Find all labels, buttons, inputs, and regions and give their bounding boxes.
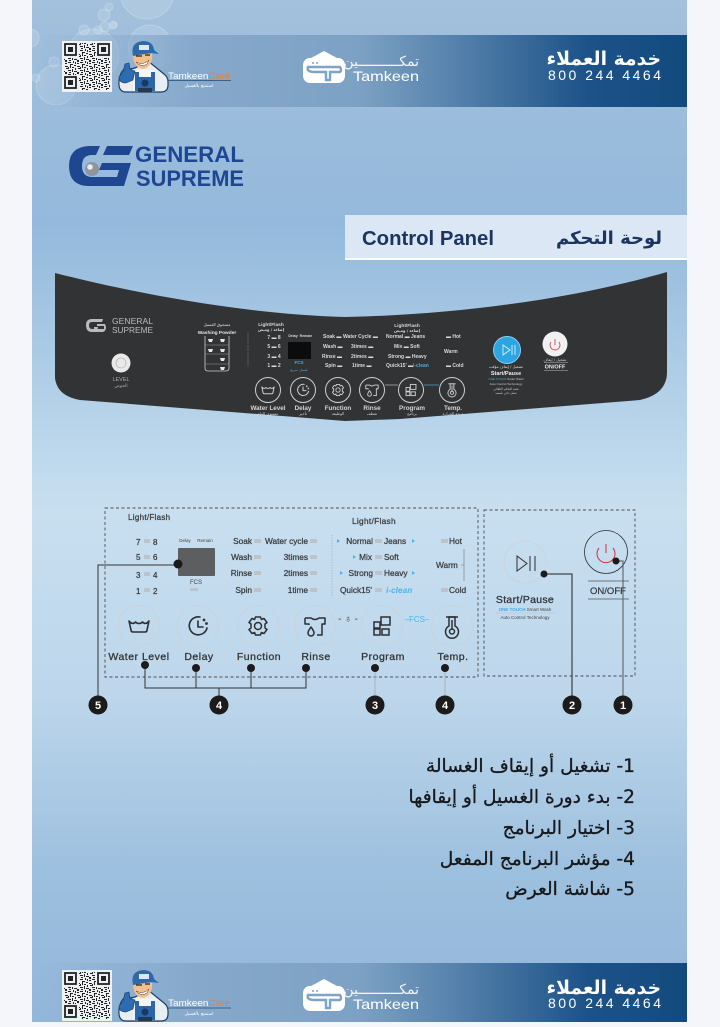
panel round buttons (256, 378, 464, 402)
panel on/off button: ON/OFF (545, 364, 566, 370)
delay button (178, 606, 218, 646)
wash and cycle labels: Water cycle (265, 536, 308, 546)
display screen (178, 538, 215, 591)
left light/flash numbers (128, 513, 170, 596)
button labels (108, 651, 469, 663)
on/off control: ON/OFF (590, 586, 626, 597)
panel cycle labels: Strong ▬ Heavy (388, 354, 427, 360)
program and temperature labels: Cold (449, 585, 466, 595)
numbered markers: 5 (95, 700, 101, 712)
panel start/pause button: تقنية التحكم التلقائي (493, 387, 519, 391)
wash and cycle labels: Soak (233, 536, 253, 546)
panel wash level indicators (258, 322, 312, 369)
program and temperature labels: Warm (436, 560, 458, 570)
left light/flash numbers: 8 (153, 538, 158, 547)
numbered markers (88, 696, 632, 714)
panel on/off button (542, 332, 568, 370)
panel digital display: غسيل سريع (290, 368, 308, 372)
panel cycle labels: إضاءة / وميض (394, 328, 420, 334)
footer mascot and TamkeenCare (119, 970, 231, 1021)
level knob: الحوض (114, 384, 128, 389)
program and temperature labels: Strong (349, 568, 373, 578)
numbered markers: 4 (216, 700, 223, 712)
brand logo: General Supreme: GENERAL (135, 142, 244, 167)
panel cycle labels: Water Cycle ▬ (343, 334, 378, 340)
child lock symbol: - ♁ - (338, 614, 358, 625)
footer customer service: خدمة العملاء (546, 978, 661, 999)
panel start/pause button: غسل ذكي بلمسة (495, 391, 517, 395)
on/off control (584, 530, 629, 599)
header QR code (62, 41, 112, 92)
header mascot and TamkeenCare (119, 41, 231, 92)
function button (238, 606, 278, 646)
panel logo: GENERAL (112, 317, 154, 326)
panel button labels: Delay (295, 405, 312, 412)
wash and cycle labels: 3times (284, 552, 308, 562)
footer mascot and TamkeenCare: TamkeenCare (168, 998, 230, 1009)
panel start/pause button: Start/Pause (491, 371, 521, 377)
program and temperature labels: Light/Flash (352, 516, 396, 526)
panel cycle labels (322, 323, 464, 369)
leader dots (141, 558, 620, 672)
header customer service (546, 49, 661, 83)
heading band: Control Panel (345, 215, 687, 260)
brand logo: General Supreme: SUPREME (136, 166, 244, 191)
left light/flash numbers: 1 (136, 587, 141, 596)
washing powder drawer: Washing Powder (198, 330, 236, 336)
start/pause control: Auto Control Technology (501, 615, 550, 620)
left light/flash numbers: 6 (153, 553, 158, 562)
program button (362, 606, 402, 646)
washing machine control panel photo (55, 272, 667, 421)
program and temperature labels: Jeans (384, 536, 406, 546)
program and temperature labels: Mix (359, 552, 373, 562)
header Tamkeen logo (303, 51, 419, 84)
panel start/pause button: تشغيل / إيقاف مؤقت (489, 364, 523, 370)
numbered Arabic legend (408, 753, 635, 900)
panel digital display (288, 342, 311, 372)
wash and cycle labels (231, 536, 317, 595)
header customer service: 800 244 4464 (548, 67, 661, 83)
water level button (118, 606, 160, 646)
washing powder drawer (198, 322, 236, 371)
numbered markers: 2 (569, 700, 575, 712)
footer band (32, 963, 687, 1022)
header mascot and TamkeenCare: TamkeenCare (168, 71, 230, 82)
button labels: Delay (184, 651, 214, 663)
wash and cycle labels: Spin (235, 585, 252, 595)
FCS link: –FCS– (405, 615, 430, 624)
panel cycle labels: Mix ▬ Soft (394, 344, 420, 350)
program and temperature labels: Normal (346, 536, 373, 546)
numbered markers: 1 (620, 700, 626, 712)
panel on/off button: تشغيل / إيقاف (543, 357, 567, 363)
brand logo: General Supreme (69, 142, 244, 191)
display screen: Remain (197, 538, 213, 543)
heading band: Control Panel: لوحة التحكم (556, 228, 662, 249)
header band (32, 35, 687, 107)
panel start/pause button: ONE TOUCH Smart Wash (488, 377, 524, 381)
button labels: Rinse (301, 651, 331, 663)
level knob: LEVEL (112, 377, 130, 383)
start/pause control: Start/Pause (496, 594, 554, 606)
panel cycle labels: Rinse ▬ (322, 354, 342, 360)
panel cycle labels: Warm (444, 349, 458, 355)
panel cycle labels: ▬ Cold (446, 363, 464, 369)
wash and cycle labels: 2times (284, 568, 308, 578)
decorative soap bubbles (21, 0, 174, 105)
panel digital display: FCS (294, 360, 304, 365)
program and temperature labels: Heavy (384, 568, 408, 578)
panel start/pause button: Auto Control Technology (490, 382, 523, 386)
button labels: Water Level (108, 651, 170, 663)
panel cycle labels: Soak ▬ (323, 334, 341, 340)
wash and cycle labels: Rinse (231, 568, 252, 578)
panel button labels: مستوى الماء (258, 411, 278, 416)
footer mascot and TamkeenCare: استمتع بالغسيل (184, 1012, 214, 1017)
panel cycle labels: 2times ▬ (351, 354, 373, 360)
numbered Arabic legend: 5- شاشة العرض (505, 879, 635, 900)
left light/flash numbers: 5 (136, 553, 141, 562)
heading band: Control Panel: Control Panel (362, 228, 494, 250)
panel cycle labels: i-clean (413, 363, 429, 369)
panel button labels (250, 405, 464, 416)
panel button labels: Water Level (250, 405, 286, 412)
header Tamkeen logo: Tamkeen (353, 68, 419, 84)
start/pause control (496, 541, 555, 620)
panel wash level indicators: 5 ▬ 6 (267, 344, 281, 350)
panel button labels: Temp. (444, 405, 462, 412)
numbered Arabic legend: 1- تشغيل أو إيقاف الغسالة (426, 753, 635, 777)
left light/flash numbers: 7 (136, 538, 141, 547)
wash and cycle labels: Wash (231, 552, 252, 562)
footer Tamkeen logo: تمكــــــــــين (343, 982, 419, 998)
panel button labels: الوظيفة (332, 411, 344, 416)
header mascot and TamkeenCare: استمتع بالغسيل (184, 84, 214, 89)
left light/flash numbers: 4 (153, 571, 158, 580)
panel cycle labels: Light/Flash (394, 323, 420, 329)
start/pause control: ONE TOUCH Smart Wash (499, 607, 552, 612)
left light/flash numbers: 2 (153, 587, 158, 596)
panel wash level indicators: 1 ▬ 2 (267, 363, 281, 369)
leader lines (98, 561, 623, 705)
display screen: Delay (179, 538, 191, 543)
washing powder drawer: مسحوق الغسيل (204, 322, 230, 327)
program and temperature labels: Hot (449, 536, 463, 546)
footer Tamkeen logo (303, 979, 419, 1012)
temperature button (432, 606, 472, 646)
panel logo: SUPREME (112, 326, 153, 335)
wash and cycle labels: 1time (288, 585, 308, 595)
button labels: Function (237, 651, 281, 663)
panel cycle labels: 3times ▬ (351, 344, 373, 350)
dashed frames (105, 508, 635, 677)
footer customer service: 800 244 4464 (548, 995, 661, 1011)
left light/flash numbers: 3 (136, 571, 141, 580)
footer QR code (62, 970, 112, 1021)
numbered Arabic legend: 3- اختيار البرنامج (503, 818, 635, 839)
footer customer service (546, 978, 661, 1011)
panel start/pause button (488, 336, 524, 395)
panel cycle labels: Quick15' ▬ (386, 363, 413, 369)
panel wash level indicators: Light/Flash (258, 322, 284, 328)
panel wash level indicators: Delay (288, 334, 298, 338)
program and temperature labels: Soft (384, 552, 399, 562)
panel cycle labels: Wash ▬ (323, 344, 343, 350)
numbered markers: 4 (442, 700, 449, 712)
panel cycle labels: ▬ Hot (446, 334, 461, 340)
panel cycle labels: Spin ▬ (325, 363, 342, 369)
button labels: Temp. (437, 651, 469, 663)
panel wash level indicators: 7 ▬ 8 (267, 335, 281, 341)
panel cycle labels: 1time ▬ (352, 363, 371, 369)
program and temperature labels (337, 516, 466, 595)
left light/flash numbers: Light/Flash (128, 513, 170, 522)
level knob (112, 354, 130, 389)
program and temperature labels: i-clean (386, 585, 412, 595)
panel button labels: تأخير (298, 411, 307, 416)
panel button labels: شطف (367, 411, 377, 416)
panel wash level indicators: إضاءة / وميض (258, 327, 284, 333)
panel cycle labels: Normal ▬ Jeans (386, 334, 425, 340)
panel logo (86, 317, 154, 335)
button labels: Program (361, 651, 405, 663)
rinse button (294, 606, 336, 646)
panel button labels: Program (399, 405, 425, 412)
footer Tamkeen logo: Tamkeen (353, 996, 419, 1012)
header Tamkeen logo: تمكــــــــــين (343, 54, 419, 70)
numbered markers: 3 (372, 700, 378, 712)
panel button labels: برنامج (407, 411, 417, 416)
program and temperature labels: Quick15' (340, 585, 372, 595)
detailed control diagram (88, 508, 635, 714)
panel button labels: Rinse (363, 405, 381, 412)
panel wash level indicators: Remain (300, 334, 312, 338)
panel button labels: Function (325, 405, 351, 412)
numbered Arabic legend: 4- مؤشر البرنامج المفعل (440, 849, 635, 870)
display screen: FCS (190, 580, 202, 586)
panel wash level indicators: 3 ▬ 4 (267, 354, 281, 360)
numbered Arabic legend: 2- بدء دورة الغسيل أو إيقافها (408, 784, 635, 808)
panel button labels: درجة الحرارة (443, 411, 464, 416)
header customer service: خدمة العملاء (546, 49, 661, 70)
